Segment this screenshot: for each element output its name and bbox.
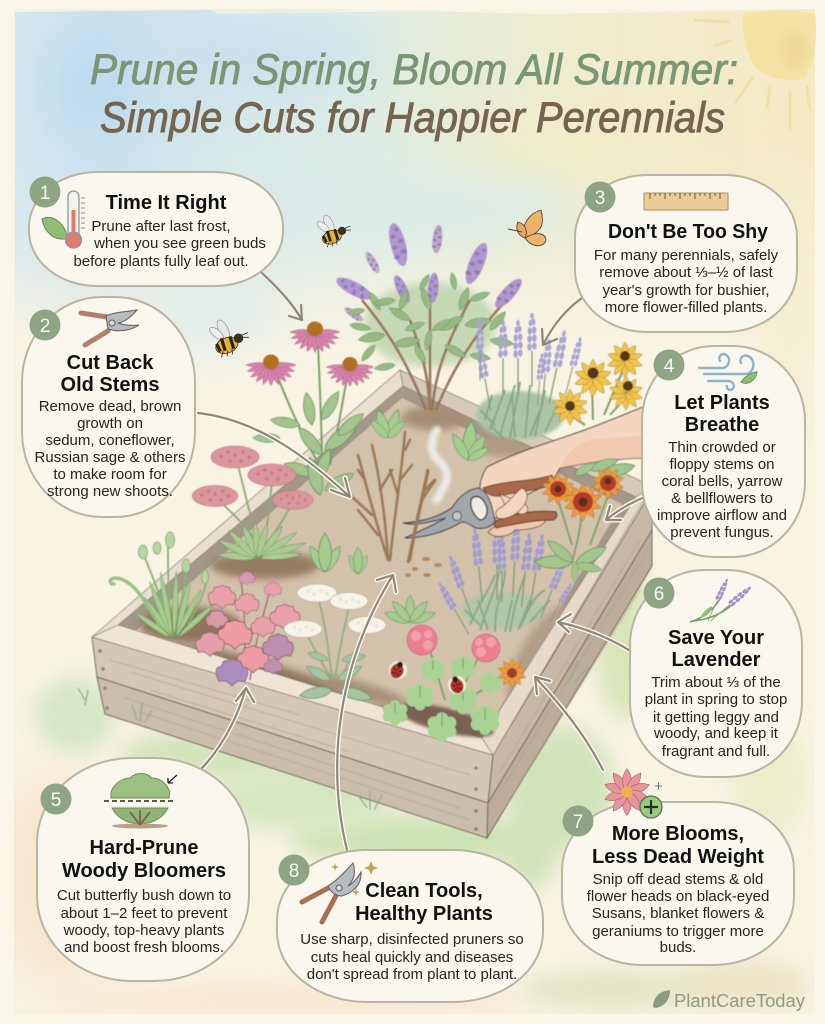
bed rim — [92, 370, 403, 637]
body text: Susans, blanket flowers & — [592, 905, 764, 922]
panel 4: Let Plants Breathe — [642, 346, 805, 557]
body text: Cut butterfly bush down to — [57, 887, 231, 904]
body text: Use sharp, disinfected pruners so — [300, 931, 524, 948]
number badge 3: 3 — [595, 188, 605, 209]
heading: Less Dead Weight — [592, 846, 764, 868]
arrow: 2 to dead stems — [198, 413, 350, 497]
number badge 1: 1 — [40, 183, 50, 204]
plant: dead brown stems — [350, 432, 435, 560]
plant: black-eyed Susans — [552, 342, 643, 425]
number badge 7: 7 — [573, 812, 583, 833]
body text: floppy stems on — [669, 456, 775, 473]
plant: yarrow — [284, 584, 386, 704]
body text: when you see green buds — [93, 235, 266, 252]
body text: about 1–2 feet to prevent — [61, 905, 228, 922]
title — [90, 46, 738, 142]
pruners — [403, 475, 557, 538]
bed front boards — [92, 637, 493, 803]
body text: before plants fully leaf out. — [73, 253, 249, 270]
panel 8: Clean Tools, Healthy Plants — [277, 850, 543, 1002]
heading — [61, 352, 159, 396]
arrow: 4 to blanket flowers — [606, 497, 645, 520]
body text: Trim about ⅓ of the — [651, 674, 781, 691]
heading: Don't Be Too Shy — [608, 221, 769, 243]
lower fingers — [488, 517, 545, 536]
number badge 8 — [278, 854, 310, 886]
heading: Clean Tools, — [365, 880, 483, 902]
number badge 6 — [644, 578, 674, 608]
smoke wisp — [432, 430, 447, 500]
body text: woody, and keep it — [653, 725, 779, 742]
body text — [300, 931, 524, 983]
body text — [657, 439, 787, 541]
icon: flower with plus — [603, 769, 662, 818]
panel 1: Time It Right — [29, 172, 283, 286]
title: Simple Cuts for Happier Perennials — [100, 94, 725, 142]
number badge 1 — [30, 176, 60, 208]
plant: small seedlings — [306, 408, 491, 626]
arrow: 3 to lavender — [542, 298, 582, 345]
body text: buds. — [660, 939, 696, 956]
bed bolts — [98, 649, 478, 831]
number badge 5: 5 — [51, 790, 61, 811]
panel 5: Hard-Prune Woody Bloomers — [37, 758, 249, 981]
bed wood grain — [110, 540, 645, 820]
number badge 6: 6 — [654, 584, 664, 605]
body text: to make room for — [53, 466, 167, 483]
heading: Breathe — [685, 414, 759, 436]
icon: butterfly — [508, 210, 546, 246]
arrow: 8 to stems — [337, 575, 396, 850]
icon: ruler — [644, 193, 728, 210]
plant: blanket flowers — [534, 455, 636, 583]
icon: wind and leaf — [699, 354, 757, 390]
insects — [208, 210, 546, 357]
body text — [587, 871, 769, 956]
icon: thermometer and leaf — [42, 191, 85, 248]
plant: butterfly bush — [333, 221, 526, 410]
heading: Healthy Plants — [355, 903, 493, 925]
panel 2: Cut Back Old Stems — [22, 297, 195, 517]
plant: back lavender — [475, 313, 584, 440]
heading: Let Plants — [674, 392, 770, 414]
body text: flower heads on black-eyed — [587, 888, 769, 905]
body text: growth on — [77, 415, 143, 432]
arrow: 1 to coneflowers — [262, 273, 302, 320]
body text: geraniums to trigger more — [592, 923, 764, 940]
body text: year's growth for bushier, — [602, 282, 770, 299]
bed right boards — [488, 490, 652, 803]
icon: pruned shrub — [104, 774, 177, 828]
body text: & bellflowers to — [671, 490, 773, 507]
bed inner walls — [118, 386, 636, 738]
body text: Prune after last frost, — [91, 218, 231, 235]
body text — [73, 218, 266, 270]
plant: coneflowers — [246, 322, 374, 497]
body text: coral bells, yarrow — [662, 473, 783, 490]
body text — [594, 247, 779, 316]
icon: bee upper — [315, 214, 351, 247]
panel 6: Save Your Lavender — [630, 570, 802, 777]
body text: fragrant and full. — [662, 743, 770, 760]
arrow: 7 to flower — [535, 677, 603, 770]
heading: Cut Back — [67, 352, 154, 374]
plant: geraniums with ladybugs — [383, 625, 527, 744]
plants — [110, 221, 643, 744]
body text — [35, 398, 185, 500]
icon: sun — [695, 11, 816, 130]
heading: Lavender — [672, 649, 761, 671]
arrows — [198, 273, 645, 850]
heading — [62, 837, 226, 882]
body text: sedum, coneflower, — [45, 432, 175, 449]
body text: woody, top-heavy plants — [63, 922, 224, 939]
body text: more flower-filled plants. — [605, 299, 767, 316]
heading: Time It Right — [106, 192, 227, 214]
title: Prune in Spring, Bloom All Summer: — [90, 46, 738, 94]
number badge 4: 4 — [664, 356, 675, 377]
number badge 3 — [584, 182, 616, 212]
icon: pruners — [81, 310, 139, 345]
body text: Russian sage & others — [35, 449, 185, 466]
body text: improve airflow and — [657, 507, 787, 524]
number badge 7 — [562, 806, 594, 836]
icon: clean pruners — [302, 861, 378, 922]
body text: remove about ⅓–½ of last — [599, 264, 774, 281]
arrow: 6 to lavender — [558, 614, 632, 652]
heading — [674, 392, 770, 436]
heading: Hard-Prune — [90, 837, 198, 859]
heading — [668, 627, 764, 671]
body text: cuts heal quickly and diseases — [311, 949, 513, 966]
number badge 2 — [30, 310, 60, 340]
panel 3: Don't Be Too Shy — [575, 175, 797, 332]
body text: For many perennials, safely — [594, 247, 779, 264]
heading: Save Your — [668, 627, 764, 649]
body text: prevent fungus. — [670, 524, 774, 541]
heading: Old Stems — [61, 374, 159, 396]
grass tufts — [78, 660, 588, 810]
heading — [592, 823, 764, 868]
bed soil — [136, 398, 622, 717]
hand holding pruners — [403, 404, 650, 563]
plant: front lavender — [436, 523, 574, 636]
dead stem in blade — [408, 470, 435, 563]
heading — [355, 880, 493, 925]
body text: Remove dead, brown — [39, 398, 181, 415]
body text: Thin crowded or — [668, 439, 776, 456]
panel 7: More Blooms, Less Dead Weight — [562, 769, 794, 965]
body text: don't spread from plant to plant. — [307, 966, 517, 983]
plant: coral bells — [196, 571, 300, 686]
raised garden bed — [78, 370, 652, 838]
heading: Woody Bloomers — [62, 860, 226, 882]
body text — [645, 674, 787, 760]
icon: bee lower — [208, 318, 249, 357]
arm and hand — [480, 404, 650, 518]
arrow: 5 to coral bells — [200, 688, 254, 770]
body text: strong new shoots. — [47, 483, 173, 500]
plant: grassy clump — [110, 532, 215, 639]
number badge 5 — [40, 784, 72, 814]
body text: Snip off dead stems & old — [593, 871, 763, 888]
icon: lavender — [690, 578, 753, 624]
number badge 2: 2 — [40, 316, 50, 337]
heading: More Blooms, — [612, 823, 744, 845]
number badge 4 — [654, 350, 684, 380]
body text: plant in spring to stop — [645, 691, 787, 708]
body text: it getting leggy and — [653, 709, 779, 726]
plant: sedum — [192, 446, 313, 561]
body text: and boost fresh blooms. — [64, 939, 224, 956]
number badge 8: 8 — [289, 861, 299, 882]
soil chips — [405, 557, 442, 577]
logo: PlantCareToday: PlantCareToday — [674, 990, 806, 1011]
body text — [57, 887, 231, 956]
